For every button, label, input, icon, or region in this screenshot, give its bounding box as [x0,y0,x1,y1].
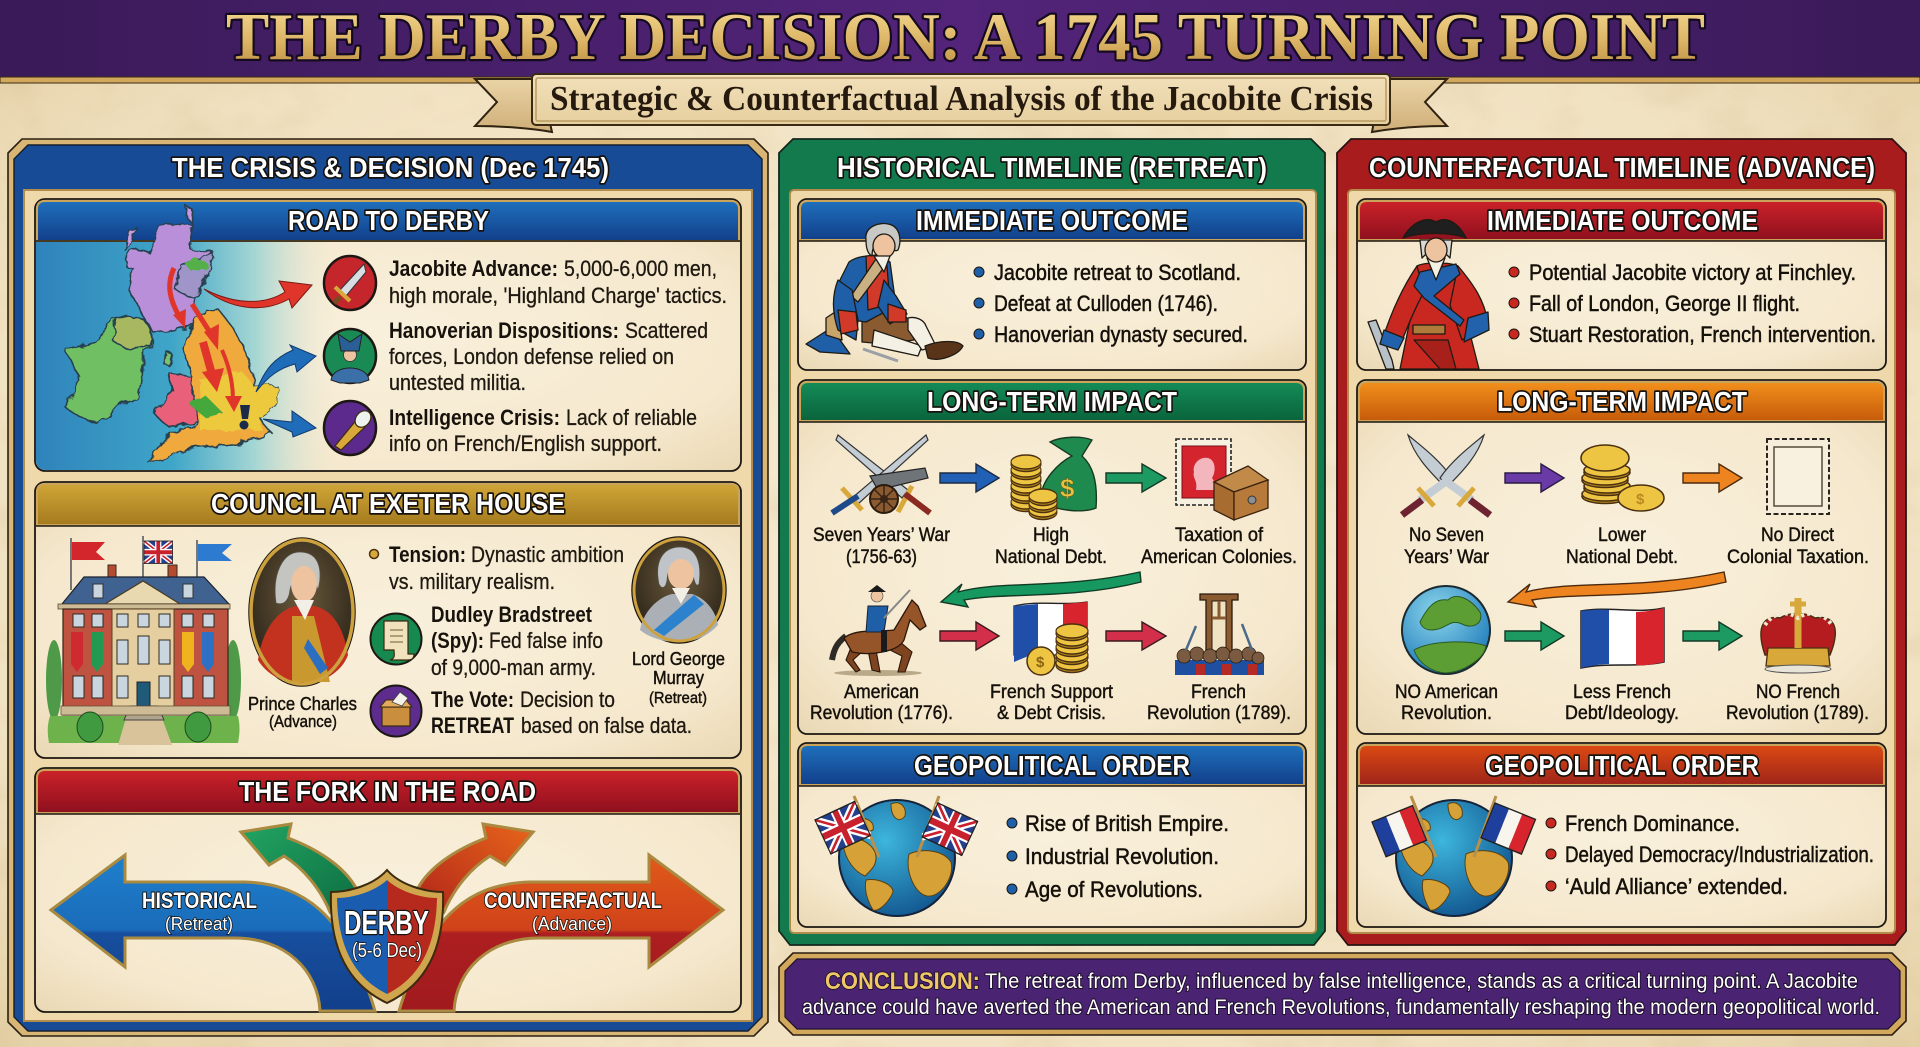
bullet list: Age of Revolutions. [1025,877,1203,902]
illustration: defeated soldier [806,224,963,361]
card: immediate outcome [798,199,1306,370]
labels row two [1395,681,1869,724]
conclusion text: The retreat from Derby, influenced by false intelligence, stands as a critical turning point. A Jacobite [985,969,1858,993]
labels row two: Revolution (1789). [1726,702,1869,724]
arrow: counterfactual advance: COUNTERFACTUAL [484,888,662,913]
labels row two: American [844,681,919,703]
arrow: counterfactual advance: (Advance) [532,914,612,934]
conclusion box [779,953,1906,1035]
bullet list: Potential Jacobite victory at Finchley. [1529,260,1856,285]
text: jacobite advance: 5,000-6,000 men, [564,256,717,281]
text: jacobite advance: high morale, 'Highland Charge' tactics. [389,283,727,308]
subtitle ribbon [475,74,1447,132]
icon: sword [324,256,376,310]
arrow [940,622,999,650]
labels row one: Taxation of [1175,524,1264,546]
labels row one: High [1033,524,1069,546]
bullet: tension: Dynastic ambition [471,542,624,567]
subtitle: Strategic & Counterfactual Analysis of the Jacobite Crisis [550,80,1373,118]
labels row two: Less French [1573,681,1671,703]
arrow [1683,464,1742,492]
bullet list [1007,811,1229,902]
arrow [1106,464,1166,492]
arrow: curved return [941,572,1141,607]
labels row two: Debt/Ideology. [1565,702,1679,724]
illustration: globe with british flags [815,796,978,916]
icon: empty stamp [1767,439,1829,514]
text: dudley bradstreet: (Spy): [431,628,484,653]
arrow: counterfactual advance [399,855,723,1011]
panel heading: HISTORICAL TIMELINE (RETREAT) [837,152,1267,183]
heading: IMMEDIATE OUTCOME [1487,205,1758,236]
panel heading: THE CRISIS & DECISION (Dec 1745) [172,152,609,183]
conclusion text [802,968,1880,1019]
text: intelligence crisis: Lack of reliable [566,405,697,430]
icon: horseman [832,585,926,676]
arrow [1505,622,1564,650]
shield: derby: (5-6 Dec) [352,940,422,962]
card: geopolitical order [1357,743,1886,927]
icon: hanoverian soldier [324,329,376,383]
text: hanoverian dispositions: Hanoverian Dispositions: [389,318,619,343]
arrow: historical retreat [51,855,375,1011]
heading: GEOPOLITICAL ORDER [1485,750,1759,781]
icon: guillotine and crowd [1175,594,1264,675]
shield: derby: DERBY [344,904,429,941]
labels row two: Revolution (1789). [1147,702,1291,724]
text: the vote: based on false data. [521,713,692,738]
card: geopolitical order [798,743,1306,927]
labels row two: NO French [1756,681,1840,703]
text: jacobite advance: Jacobite Advance: [389,256,558,281]
text: hanoverian dispositions: forces, London defense relied on [389,344,674,369]
arrow [1683,622,1742,650]
bullet list: Fall of London, George II flight. [1529,291,1800,316]
label: lord george murray: (Retreat) [649,690,707,707]
heading: IMMEDIATE OUTCOME [916,205,1188,236]
map of Britain and Ireland [65,207,277,463]
panel: the crisis and decision [8,139,768,1036]
bullet list [974,260,1248,347]
portrait: lord george murray [632,537,726,643]
icon: national debt money bag: $ [1060,473,1075,503]
labels row two: NO American [1395,681,1498,703]
label: lord george murray: Murray [653,668,704,688]
labels row one: No Seven [1409,524,1484,546]
illustration: globe with french flags [1372,796,1536,916]
labels row one [1404,524,1869,568]
arrow: historical retreat: (Retreat) [165,914,233,934]
heading: LONG-TERM IMPACT [927,386,1177,417]
label: prince charles: (Advance) [269,712,337,731]
card: the fork in the road [35,768,741,1012]
arrow: green branch [241,824,356,912]
bullet: tension: vs. military realism. [389,569,555,594]
text: the vote: RETREAT [431,713,514,738]
text: intelligence crisis [389,405,697,456]
text: the vote: Decision to [520,687,615,712]
bullet list: Defeat at Culloden (1746). [994,291,1218,316]
text: dudley bradstreet [431,602,603,680]
bullet list: Hanoverian dynasty secured. [994,322,1248,347]
labels row one: American Colonies. [1141,546,1297,568]
icon: french flag and coins: $ [1036,654,1045,671]
labels row two [810,681,1291,724]
text: jacobite advance [389,256,727,308]
labels row two: French [1191,681,1246,703]
card: immediate outcome [1357,199,1886,370]
arrow [940,464,999,492]
labels row two: Revolution (1776). [810,702,953,724]
text: dudley bradstreet: Dudley Bradstreet [431,602,593,627]
bullet list: Jacobite retreat to Scotland. [994,260,1241,285]
derby marker [240,405,250,430]
arrow [1505,464,1564,492]
labels row two: & Debt Crisis. [997,702,1106,724]
bullet list: Industrial Revolution. [1025,844,1219,869]
heading: COUNCIL AT EXETER HOUSE [211,488,565,519]
panel: historical timeline [779,139,1325,945]
icon: coins [1581,445,1664,511]
label: lord george murray: Lord George [632,649,725,669]
card: council at exeter house [35,482,741,758]
arrow: advance to sword [204,281,312,308]
icon: broken swords [1402,435,1490,515]
panel: counterfactual timeline [1337,139,1906,945]
icon: french flag [1581,608,1664,668]
bullet list: Delayed Democracy/Industrialization. [1565,842,1874,867]
heading: LONG-TERM IMPACT [1497,386,1747,417]
text: hanoverian dispositions: untested militia. [389,370,526,395]
label: prince charles: Prince Charles [248,693,357,714]
text: dudley bradstreet: of 9,000-man army. [431,655,596,680]
icon: scroll [370,614,422,664]
text: hanoverian dispositions: Scattered [625,318,708,343]
arrow: curved return [1508,572,1726,607]
bullet list: Stuart Restoration, French intervention. [1529,322,1876,347]
labels row two: Revolution. [1401,702,1492,724]
title banner [0,0,1920,83]
labels row one [813,524,1297,568]
text: intelligence crisis: info on French/English support. [389,431,662,456]
illustration: exeter house [46,536,241,745]
bullet list: Rise of British Empire. [1025,811,1229,836]
icon: coins: $ [1636,491,1645,508]
labels row one: National Debt. [995,546,1107,568]
text: the vote: The Vote: [431,687,514,712]
labels row one: Years’ War [1404,546,1489,568]
card: long-term impact [798,380,1306,734]
labels row one: (1756-63) [846,546,917,568]
blue arrows to intelligence [256,345,316,437]
icon: french flag and coins [1014,602,1088,675]
icon: ballot box [370,686,422,736]
shield: derby [331,870,443,1003]
bullet list [1546,811,1874,899]
icon: national debt money bag [1011,437,1096,520]
heading: ROAD TO DERBY [288,205,489,236]
conclusion text: CONCLUSION: [825,968,980,995]
heading: GEOPOLITICAL ORDER [914,750,1190,781]
labels row one: National Debt. [1566,546,1678,568]
card: long-term impact [1357,380,1886,734]
title: THE DERBY DECISION: A 1745 TURNING POINT [226,0,1705,74]
labels row one: Seven Years’ War [813,524,950,546]
labels row one: Lower [1598,524,1646,546]
labels row one: Colonial Taxation. [1727,546,1869,568]
illustration: victorious soldier [1368,220,1489,369]
bullet: tension: Tension: [389,542,466,567]
arrow: historical retreat: HISTORICAL [142,888,257,913]
text: dudley bradstreet: Fed false info [489,628,603,653]
card: road to derby [35,199,741,471]
icon: swords and cannon [832,435,930,513]
arrow: orange branch [418,824,533,912]
invasion arrows on map [170,268,242,412]
labels row two: French Support [990,681,1114,703]
bullet list: ‘Auld Alliance’ extended. [1565,874,1788,899]
labels row one: No Direct [1761,524,1835,546]
text: the vote [431,687,692,738]
label: prince charles [248,693,357,731]
icon: spyglass [324,401,376,455]
text: intelligence crisis: Intelligence Crisis: [389,405,560,430]
text: hanoverian dispositions [389,318,708,395]
bullet: tension [370,542,624,594]
icon: globe [1402,586,1490,674]
icon: stamp and chest [1176,439,1268,520]
bullet list: French Dominance. [1565,811,1740,836]
label: lord george murray [632,649,725,707]
portrait: prince charles [249,538,355,686]
icon: crown [1761,598,1835,673]
arrow [1106,622,1166,650]
heading: THE FORK IN THE ROAD [239,776,536,807]
bullet list [1509,260,1876,347]
